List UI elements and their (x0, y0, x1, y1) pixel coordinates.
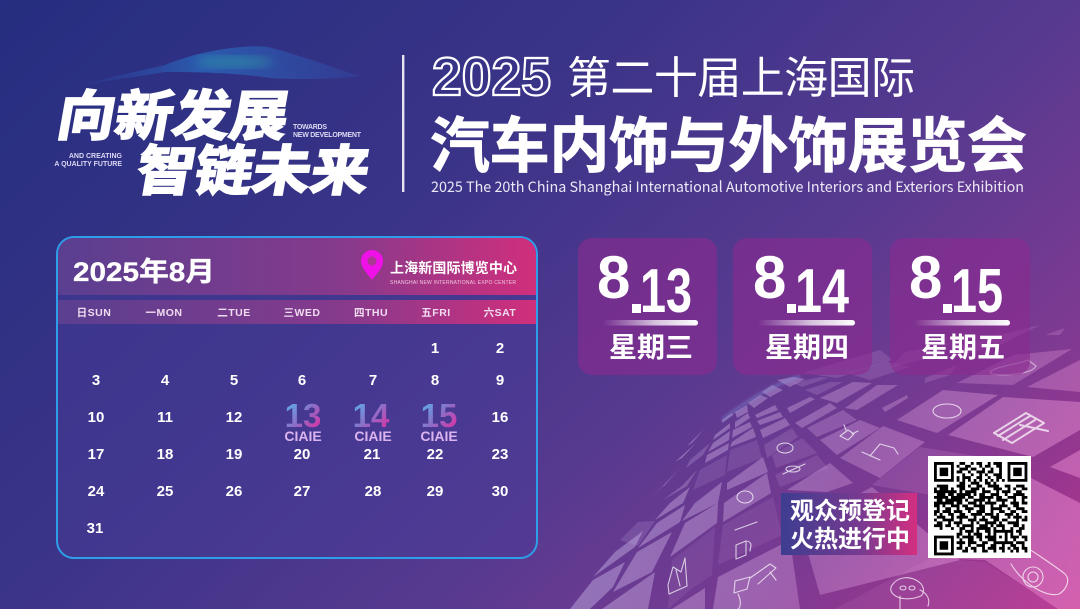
globe of part tiles (570, 325, 1080, 609)
slogan english left: AND CREATING (69, 153, 123, 160)
icon: electric plug (891, 578, 929, 609)
exhibition dates: CIAIE (284, 428, 322, 444)
month heading: 2025年8月 (73, 257, 215, 287)
divider (402, 55, 404, 192)
date card 8.13: 13 (640, 257, 692, 326)
slogan english left: A QUALITY FUTURE (54, 161, 122, 168)
calendar dates: 3 (92, 372, 100, 389)
icon: dial (777, 443, 793, 453)
weekday labels: 二TUE (217, 307, 251, 319)
calendar dates: 7 (369, 372, 377, 389)
icon: pedal grid (994, 413, 1048, 443)
calendar dates: 30 (492, 483, 508, 500)
icon: car outline (990, 360, 1036, 375)
exhibition dates: 13 (285, 397, 321, 434)
calendar dates: 27 (294, 483, 310, 500)
calendar dates: 4 (161, 372, 170, 389)
globe rim glow (722, 376, 800, 420)
slogan english right: TOWARDS (293, 124, 327, 131)
weekday band (58, 300, 536, 324)
exhibition dates: CIAIE (354, 428, 392, 444)
calendar body (57, 237, 537, 558)
calendar dates: 12 (226, 409, 242, 426)
QR code (928, 456, 1031, 558)
slogan english left (54, 153, 123, 168)
registration banner: 观众预登记 (790, 491, 910, 526)
exhibition dates: 15 (421, 397, 457, 434)
calendar dates: 26 (226, 483, 242, 500)
calendar dates: 21 (364, 446, 380, 463)
teal glow (197, 56, 273, 68)
exhibition dates (284, 397, 458, 444)
weekday labels: 五FRI (421, 307, 451, 319)
icon: location pin (361, 250, 383, 280)
calendar dates: 20 (294, 446, 310, 463)
calendar dates: 10 (88, 409, 104, 426)
date card 8.15: 8 (909, 244, 942, 311)
calendar dates: 23 (492, 446, 508, 463)
weekday labels: 日SUN (77, 307, 111, 319)
calendar header (58, 238, 536, 295)
calendar dates: 17 (88, 446, 104, 463)
registration banner: 火热进行中 (790, 519, 910, 554)
date card 8.14: 14 (795, 257, 849, 326)
calendar dates: 18 (157, 446, 173, 463)
calendar dates (87, 340, 508, 537)
calendar dates: 22 (427, 446, 443, 463)
date card 8.15: 15 (951, 257, 1003, 326)
slogan line 2: 智链未来 (131, 127, 377, 206)
date card 8.13: 8 (597, 244, 630, 311)
lower left tile columns (570, 429, 771, 609)
icon: car part (1011, 540, 1068, 595)
calendar dates: 31 (87, 520, 103, 537)
title block (430, 42, 1027, 197)
lower right tiles (713, 349, 1080, 609)
panel: calendar (57, 237, 537, 558)
calendar dates: 16 (492, 409, 508, 426)
date card 8.14 (733, 238, 872, 375)
calendar dates: 11 (157, 409, 173, 426)
upper faded tiles (803, 325, 1065, 383)
date card 8.15 (890, 238, 1030, 375)
slogan english right: NEW DEVELOPMENT (293, 132, 362, 139)
calendar dates: 28 (365, 483, 381, 500)
title line 2: 汽车内饰与外饰展览会 (430, 98, 1027, 185)
weekday labels: 三WED (284, 307, 320, 319)
weekday labels: 六SAT (484, 306, 516, 319)
icon: shaft (783, 464, 805, 474)
calendar dates: 25 (157, 483, 173, 500)
calendar dates: 1 (431, 340, 439, 357)
icon: steering wheel (933, 404, 961, 418)
exhibition dates: 14 (353, 397, 390, 434)
calendar dates: 6 (298, 372, 306, 389)
calendar dates: 5 (230, 372, 238, 389)
title line 1: 第二十届上海国际 (567, 42, 915, 106)
venue name: 上海新国际博览中心 (390, 258, 517, 278)
calendar dates: 9 (496, 372, 504, 389)
title english: 2025 The 20th China Shanghai International Automotive Interiors and Exteriors Exhibition (431, 176, 1024, 197)
calendar dates: 19 (226, 446, 242, 463)
icon: robot arm (862, 444, 898, 460)
icon: seat (735, 522, 757, 559)
date card 8.14: 8 (753, 244, 786, 311)
exhibition dates: CIAIE (420, 428, 458, 444)
date card 8.15: 星期五 (921, 326, 1005, 366)
calendar dates: 29 (427, 483, 443, 500)
slogan english right (293, 124, 362, 139)
part line icons (668, 360, 1068, 609)
registration banner (781, 491, 917, 555)
date card 8.14: 星期四 (765, 326, 849, 366)
icon: gear (737, 491, 753, 503)
calendar dates: 2 (496, 340, 504, 357)
upper tile columns (705, 377, 908, 492)
icon: frame (668, 558, 687, 594)
calendar dates: 24 (88, 483, 105, 500)
weekday labels (77, 306, 516, 319)
weekday labels: 四THU (354, 307, 388, 319)
weekday labels: 一MON (146, 307, 182, 319)
slogan (52, 72, 377, 206)
year outlined: 2025 (432, 47, 551, 107)
car silhouette (72, 46, 360, 88)
icon: bracket (840, 425, 858, 440)
venue english: SHANGHAI NEW INTERNATIONAL EXPO CENTER (390, 280, 516, 286)
icon: robot arm large (734, 564, 776, 609)
slogan line 1: 向新发展 (52, 72, 296, 151)
date card 8.13: 星期三 (609, 326, 693, 366)
date card 8.13 (578, 238, 717, 375)
calendar dates: 8 (431, 372, 439, 389)
